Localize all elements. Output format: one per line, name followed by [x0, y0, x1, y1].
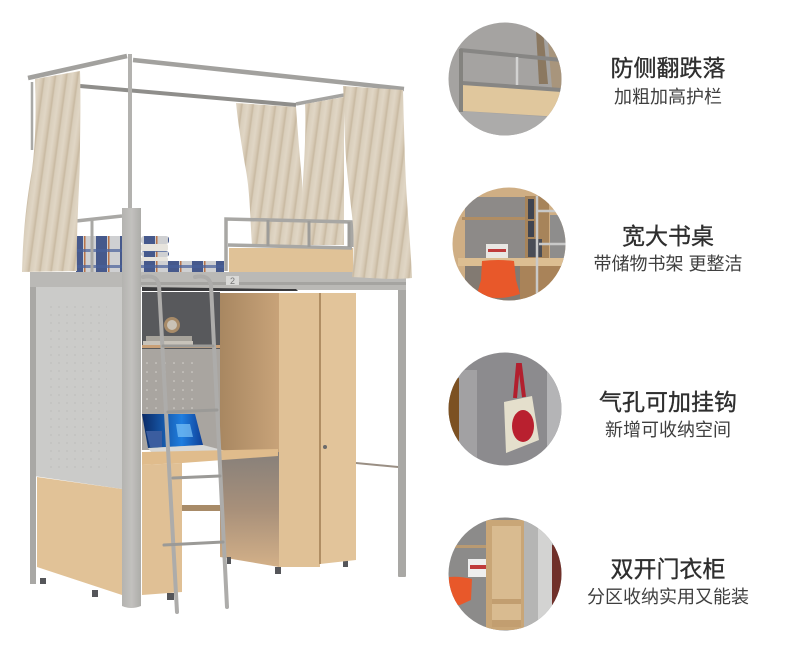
- wardrobe feet: [227, 557, 348, 574]
- shelf: [142, 345, 243, 348]
- dark back wall: [142, 292, 220, 450]
- sub text: 加粗加高护栏: [614, 87, 722, 107]
- heading: 气孔可加挂钩: [599, 389, 737, 415]
- sub text: 新增可收纳空间: [605, 420, 731, 440]
- rear curtain middle: [236, 103, 303, 245]
- heading: 防侧翻跌落: [610, 55, 726, 81]
- front curtain right: [343, 86, 412, 279]
- heading: 宽大书桌: [622, 223, 714, 249]
- circle photo: guard rail: [448, 22, 562, 136]
- door lock: [323, 445, 327, 449]
- circle photo: open wardrobe: [448, 518, 562, 630]
- feature 3: hook: [445, 350, 737, 470]
- bed number label: [226, 276, 239, 286]
- wardrobe front: [279, 293, 320, 567]
- mattress: [76, 261, 224, 272]
- rear curtain right: [302, 97, 344, 245]
- loft bed illustration: [22, 54, 412, 612]
- feature 4: wardrobe: [445, 515, 749, 635]
- wardrobe door: [320, 293, 356, 564]
- right guard rail with wood panel: [226, 219, 353, 273]
- desk pedestal: [142, 463, 182, 595]
- bed rail: [30, 272, 406, 291]
- circle photo: bag on hook: [448, 352, 562, 466]
- feature 2: desk: [450, 185, 743, 306]
- cross bar under desk: [182, 505, 222, 511]
- perforated back panel: [142, 349, 220, 450]
- desk top: [142, 449, 278, 465]
- pedestal feet: [40, 578, 174, 600]
- bed number label: 2: [230, 276, 235, 286]
- circle photo: desk: [452, 188, 566, 300]
- canopy frame: [28, 54, 404, 210]
- lower cross bar: [356, 462, 398, 468]
- right leg: [398, 288, 406, 577]
- main front post: [122, 208, 141, 608]
- folded plaid bedding: [76, 236, 169, 263]
- laptop: [142, 414, 226, 453]
- feature 1: guard rail: [445, 20, 726, 140]
- sub text: 分区收纳实用又能装: [587, 587, 749, 607]
- left rear post: [30, 277, 36, 584]
- books: [143, 336, 193, 345]
- left guard rail: [76, 216, 122, 272]
- wardrobe inner side: [220, 293, 279, 452]
- alarm clock: [164, 317, 180, 333]
- ladder: [143, 276, 227, 612]
- sub text: 带储物书架 更整洁: [593, 254, 743, 274]
- heading: 双开门衣柜: [610, 556, 726, 582]
- front curtain left: [22, 71, 80, 272]
- left panel: [34, 277, 122, 489]
- lower wood panel: [37, 477, 122, 595]
